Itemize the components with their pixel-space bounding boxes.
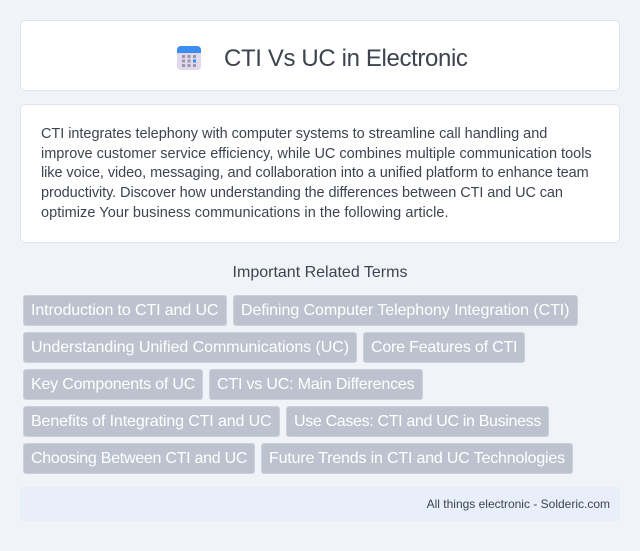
description text: optimize Your business communications in the following article. xyxy=(41,205,449,221)
footer text: All things electronic - Solderic.com xyxy=(427,497,610,511)
description text: like voice, video, messaging, and collaboration into a unified platform to enhance team xyxy=(41,165,589,181)
title: CTI Vs UC in Electronic xyxy=(224,45,468,72)
related terms tags: Core Features of CTI xyxy=(371,339,517,356)
related terms tags: Choosing Between CTI and UC xyxy=(31,450,247,467)
related terms tags: Introduction to CTI and UC xyxy=(31,302,218,319)
related terms tags: Key Components of UC xyxy=(31,376,195,393)
description text: CTI integrates telephony with computer systems to streamline call handling and xyxy=(41,126,547,142)
icon: calendar xyxy=(177,46,201,70)
related terms tags: Understanding Unified Communications (UC) xyxy=(31,339,349,356)
section heading: Important Related Terms xyxy=(233,264,407,281)
related terms tags: Use Cases: CTI and UC in Business xyxy=(294,413,541,430)
related terms tags: Defining Computer Telephony Integration (CTI) xyxy=(241,302,569,319)
related terms tags: Future Trends in CTI and UC Technologies xyxy=(269,450,565,467)
related terms tags xyxy=(23,295,578,474)
related terms tags: CTI vs UC: Main Differences xyxy=(217,376,414,393)
footer bar xyxy=(20,487,620,521)
description panel xyxy=(20,104,620,243)
description text xyxy=(41,126,592,221)
header panel xyxy=(20,20,620,91)
description text: improve customer service efficiency, while UC combines multiple communication tools xyxy=(41,146,592,162)
description text: productivity. Discover how understanding the differences between CTI and UC can xyxy=(41,185,563,201)
related terms tags: Benefits of Integrating CTI and UC xyxy=(31,413,272,430)
